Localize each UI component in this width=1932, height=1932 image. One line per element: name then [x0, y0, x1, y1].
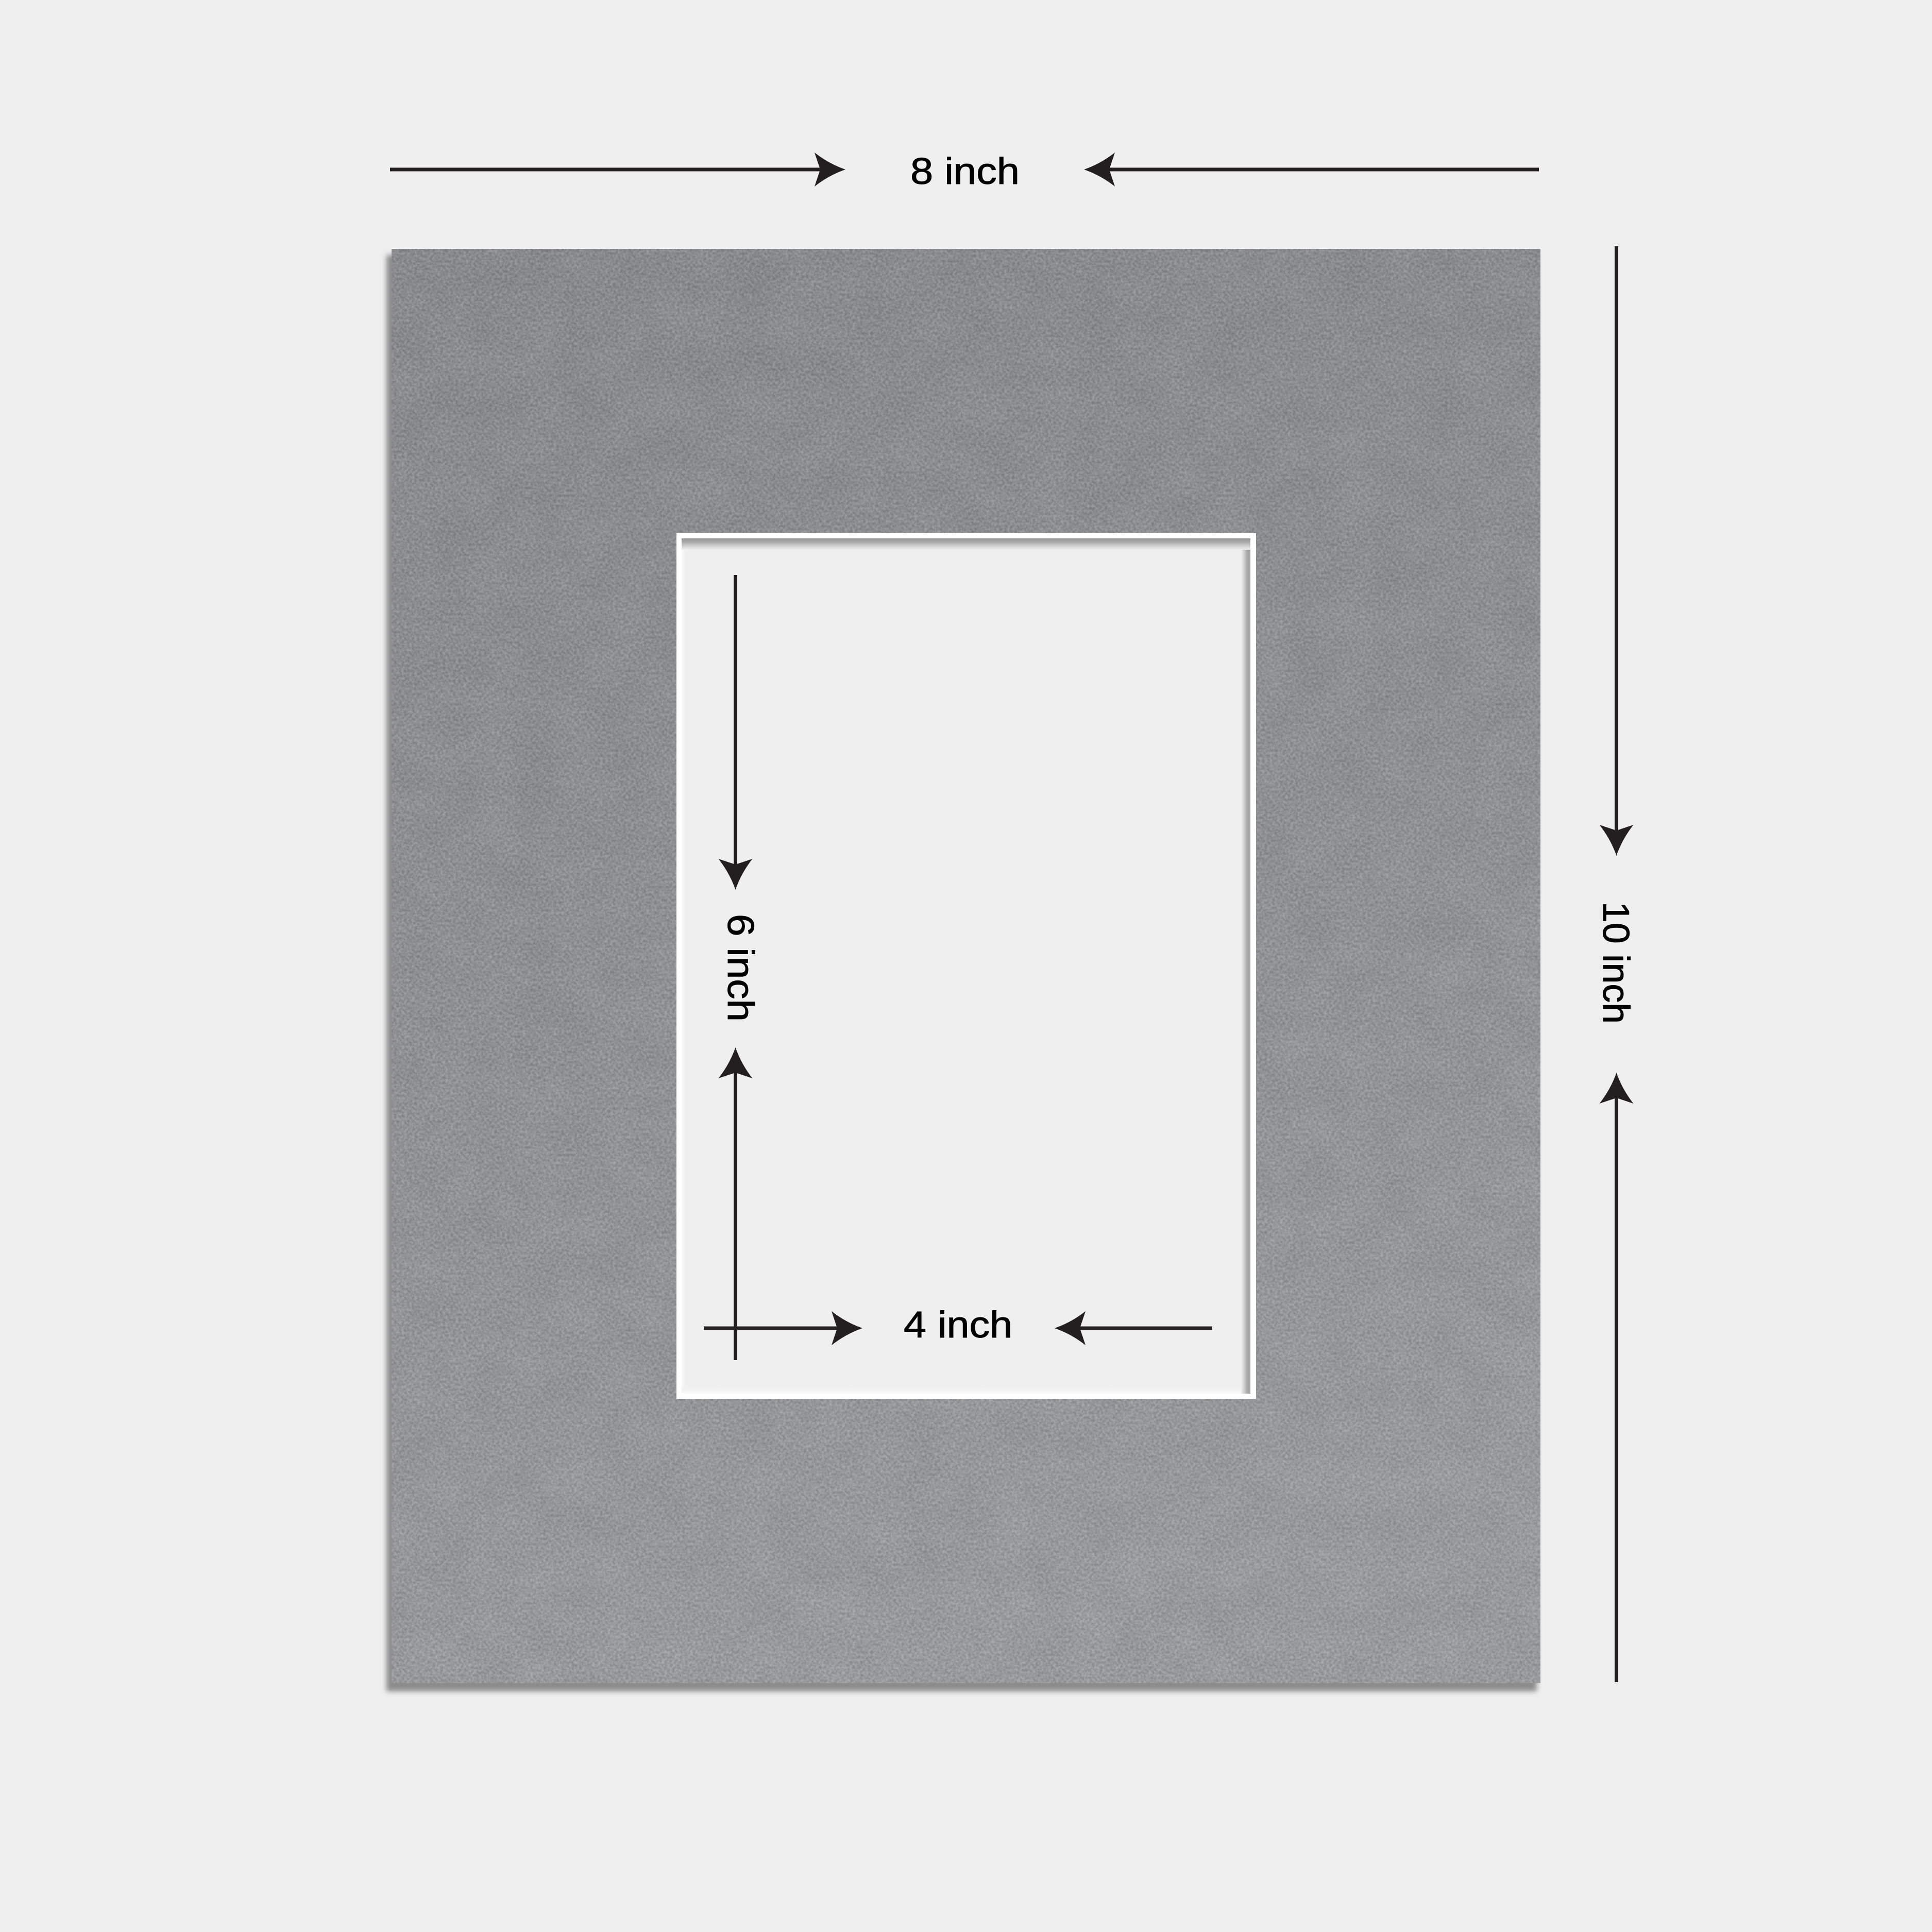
window width dimension: 4 inch — [704, 1304, 1212, 1346]
arrow: left, pointing right — [390, 152, 845, 187]
left inner highlight — [682, 538, 686, 1394]
width dimension: 8 inch — [390, 151, 1539, 192]
arrow: left, pointing right — [704, 1311, 862, 1345]
label: 8 inch: 8 inch — [910, 151, 1020, 192]
window interior — [682, 538, 1250, 1394]
mat paper grain — [392, 249, 1540, 1683]
mat tonal blotches — [392, 249, 1540, 1683]
top inner shadow — [682, 538, 1250, 550]
arrow: bottom, pointing up — [1599, 1073, 1633, 1682]
arrow: right, pointing left — [1084, 152, 1539, 187]
mat board — [386, 249, 1540, 1691]
arrow: lower, pointing up — [718, 1047, 752, 1360]
label: 10 inch: 10 inch — [1595, 902, 1636, 1024]
bottom inner highlight — [682, 1387, 1250, 1394]
window white bevel — [676, 533, 1256, 1399]
window height dimension: 6 inch — [718, 575, 761, 1360]
arrow: right, pointing left — [1055, 1311, 1212, 1345]
height dimension: 10 inch — [1595, 246, 1636, 1682]
label: 4 inch: 4 inch — [904, 1304, 1012, 1346]
arrow: top, pointing down — [1599, 246, 1633, 856]
arrow: upper, pointing down — [718, 575, 752, 890]
mat window opening — [676, 533, 1256, 1399]
mat drop shadow — [386, 255, 1537, 1691]
label: 6 inch: 6 inch — [720, 914, 761, 1022]
right inner shadow — [1241, 538, 1250, 1394]
mat surface — [392, 249, 1540, 1683]
